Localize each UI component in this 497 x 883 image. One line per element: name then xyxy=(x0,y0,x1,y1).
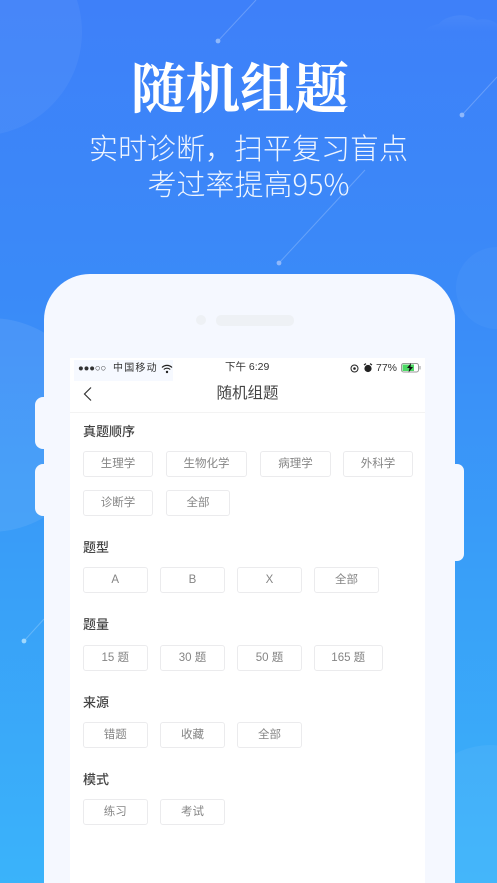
option buttons: 外科学 xyxy=(361,458,395,470)
title: 随机组题 xyxy=(131,59,349,120)
section: 题型 xyxy=(83,540,379,593)
subtitle: 实时诊断，扫平复习盲点 xyxy=(89,126,408,168)
option buttons: 50 题 xyxy=(256,652,283,664)
option buttons xyxy=(83,645,383,671)
option buttons: 考试 xyxy=(181,806,204,818)
section: 来源 xyxy=(83,695,302,748)
section: 真题顺序 xyxy=(83,424,413,516)
option buttons xyxy=(83,722,302,748)
option buttons: 15 题 xyxy=(102,652,129,664)
option buttons: 收藏 xyxy=(181,729,204,741)
option buttons: 全部 xyxy=(258,729,281,741)
heading: 题型 xyxy=(83,540,109,555)
status bar xyxy=(74,360,420,381)
option buttons: B xyxy=(189,574,196,586)
option buttons xyxy=(83,567,379,593)
phone body xyxy=(44,274,455,883)
battery percent: 77% xyxy=(376,362,397,374)
signal dots: ●●●○○ xyxy=(78,363,106,374)
status tint xyxy=(74,360,173,381)
option buttons: 生物化学 xyxy=(184,458,230,470)
subtitle xyxy=(89,126,408,204)
section: 模式 xyxy=(83,772,225,825)
option buttons: 全部 xyxy=(186,497,210,509)
option buttons: A xyxy=(111,574,119,586)
rotation lock icon xyxy=(350,364,358,372)
left side button lower xyxy=(35,464,55,516)
option buttons: 诊断学 xyxy=(101,497,135,509)
alarm icon xyxy=(364,363,372,372)
battery icon xyxy=(401,363,420,372)
carrier: 中国移动 xyxy=(113,363,158,374)
section: 题量 xyxy=(83,617,383,671)
left side button upper xyxy=(35,397,55,449)
heading: 模式 xyxy=(83,772,109,787)
option buttons: 练习 xyxy=(104,806,127,818)
option buttons xyxy=(83,451,413,516)
heading: 真题顺序 xyxy=(83,424,135,439)
subtitle: 考过率提高95% xyxy=(147,162,350,204)
phone mockup xyxy=(35,274,464,883)
app screen xyxy=(70,358,425,883)
screen title: 随机组题 xyxy=(216,385,278,402)
option buttons xyxy=(83,799,225,825)
option buttons: 全部 xyxy=(335,574,358,586)
heading: 题量 xyxy=(83,617,109,632)
option buttons: 165 题 xyxy=(331,652,365,664)
option buttons: 生理学 xyxy=(101,458,135,470)
wifi icon xyxy=(162,364,172,374)
phone camera xyxy=(196,315,206,325)
option buttons: 30 题 xyxy=(179,652,206,664)
option buttons: X xyxy=(266,574,273,586)
phone speaker xyxy=(216,315,294,326)
back arrow xyxy=(84,387,92,401)
option buttons: 错题 xyxy=(104,729,127,741)
nav bar xyxy=(70,380,425,413)
heading: 来源 xyxy=(83,695,109,710)
option buttons: 病理学 xyxy=(278,458,313,470)
right side button xyxy=(445,464,464,561)
time: 下午 6:29 xyxy=(225,361,269,373)
